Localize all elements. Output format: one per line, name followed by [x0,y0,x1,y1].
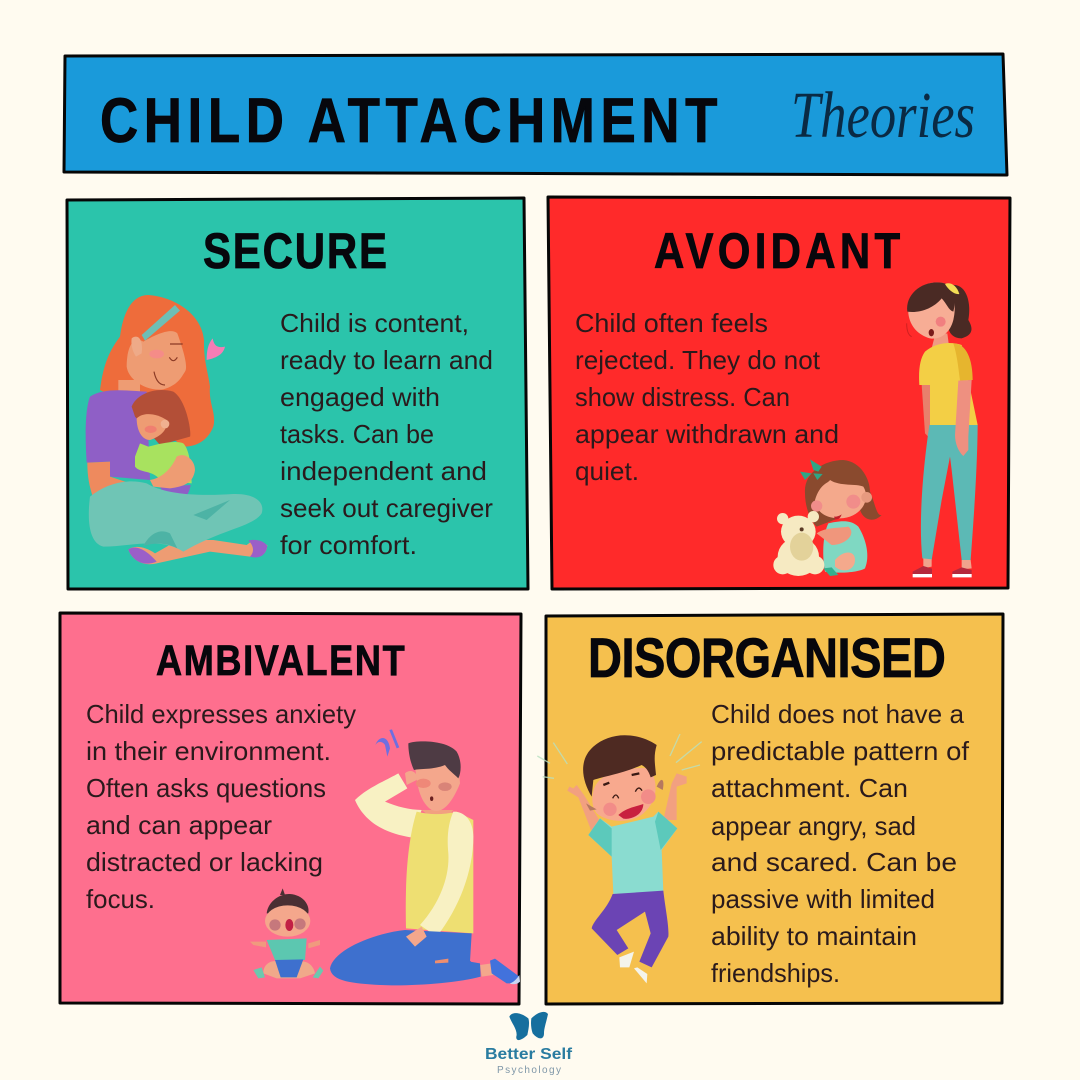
text: avoidant description: Child often feels [575,308,768,338]
text: avoidant description: appear withdrawn and [575,419,839,449]
heading: avoidant: AVOIDANT [654,223,900,279]
text: secure description: tasks. Can be [280,419,434,449]
text: ambivalent description: Often asks questions [86,773,326,803]
subtitle: theories: Theories [791,79,975,152]
logo: better self psychology [485,1012,573,1076]
text: secure description: engaged with [280,382,440,412]
text: ambivalent description: focus. [86,884,155,914]
text: disorganised description: attachment. Can [711,773,908,803]
text: ambivalent description [86,699,356,914]
illustration: kneeling father and crying baby [250,729,520,985]
panel: disorganised [537,614,1003,1004]
text: secure description: seek out caregiver [280,493,493,523]
wordmark: Better Self [485,1046,573,1063]
text: secure description: independent and [280,456,487,486]
text: avoidant description [575,308,839,486]
text: disorganised description: appear angry, sad [711,811,916,841]
text: avoidant description: rejected. They do not [575,345,821,375]
icon: butterfly [509,1012,548,1040]
heading: disorganised: DISORGANISED [588,626,946,689]
panel: ambivalent [60,613,521,1004]
text: ambivalent description: and can appear [86,810,272,840]
illustration: standing mother, child and teddy [773,282,978,577]
text: disorganised description: predictable pattern of [711,736,970,766]
text: disorganised description: friendships. [711,958,840,988]
text: disorganised description: passive with limited [711,884,935,914]
text: secure description: ready to learn and [280,345,493,375]
heading: ambivalent: AMBIVALENT [156,637,405,685]
text: ambivalent description: Child expresses anxiety [86,699,356,729]
title banner [64,54,1007,175]
heading: secure: SECURE [203,223,387,279]
text: secure description: for comfort. [280,530,417,560]
text: ambivalent description: in their environment. [86,736,331,766]
text: disorganised description: Child does not have a [711,699,965,729]
title: child attachment: CHILD ATTACHMENT [100,86,717,156]
panel: secure [67,198,528,589]
text: avoidant description: show distress. Can [575,382,790,412]
illustration: jumping boy [537,734,702,983]
panel: avoidant [548,197,1010,589]
illustration: mother hugging child [86,295,267,564]
text: disorganised description: and scared. Can be [711,847,957,877]
text: secure description [280,308,493,560]
text: ambivalent description: distracted or lacking [86,847,323,877]
text: disorganised description [711,699,970,988]
text: avoidant description: quiet. [575,456,639,486]
text: disorganised description: ability to maintain [711,921,917,951]
tagline: Psychology [497,1065,561,1076]
text: secure description: Child is content, [280,308,469,338]
